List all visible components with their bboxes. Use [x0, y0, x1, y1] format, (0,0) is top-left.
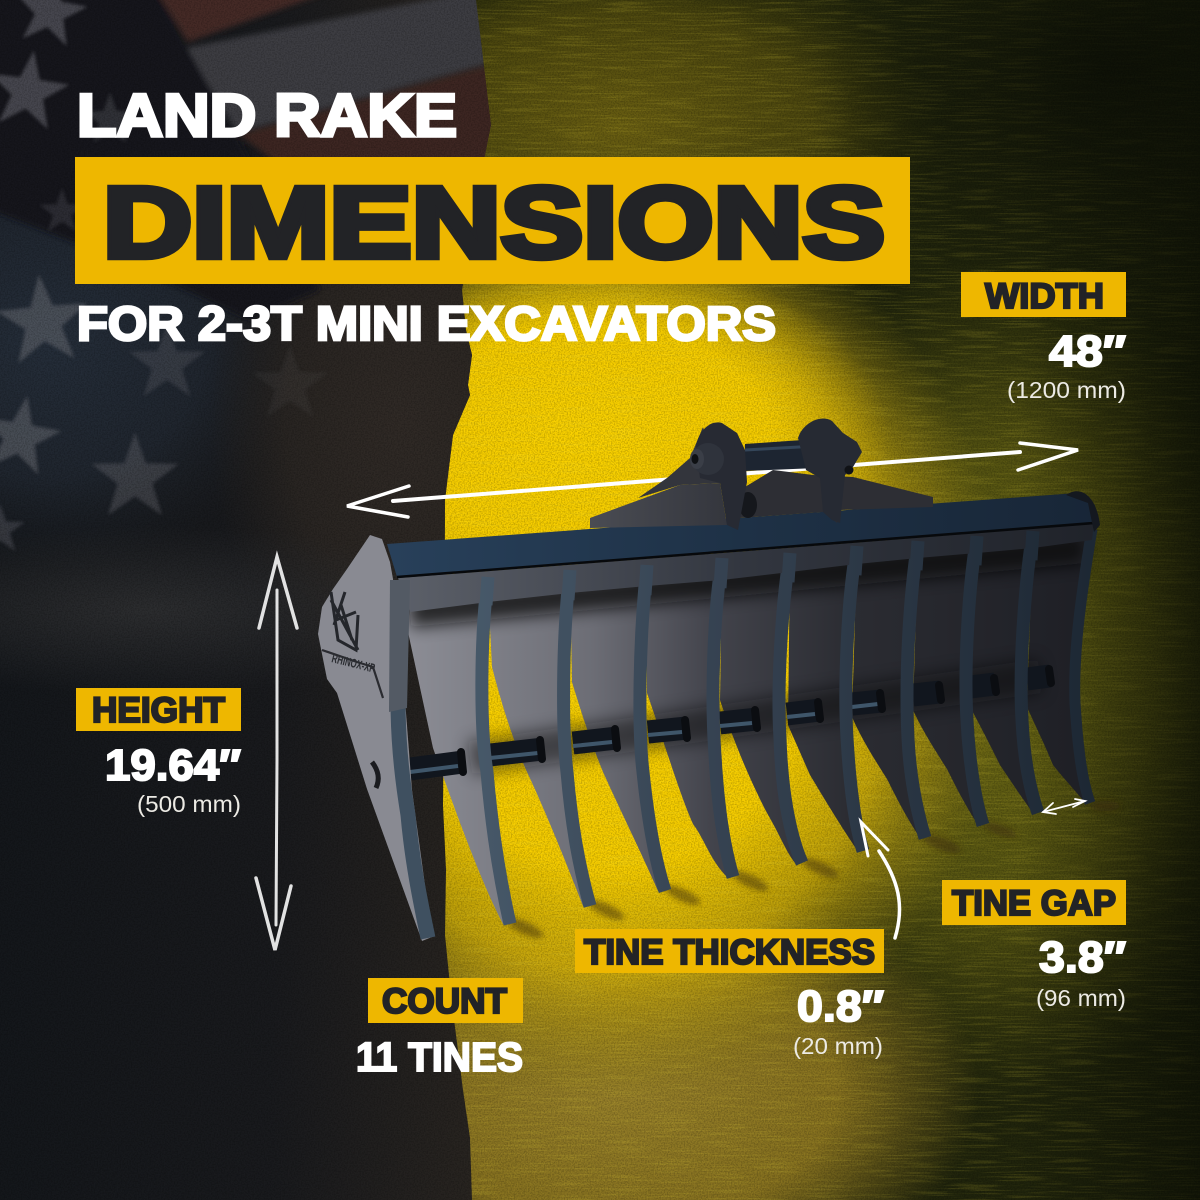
callout: tine gap: TINE GAP [952, 884, 1116, 923]
callout: tine gap: 3.8″ [1039, 933, 1126, 982]
side plate slot [372, 762, 378, 788]
callout: tine gap [942, 880, 1126, 1011]
rib tops [486, 531, 1033, 605]
rhinox-xp logo: RHINOX-XP [330, 651, 376, 676]
tine ground shadows [504, 801, 1120, 942]
beam end cap [1066, 491, 1100, 532]
callout: width [961, 272, 1126, 403]
callout: tine thickness: (20 mm) [793, 1033, 883, 1059]
front left plate [590, 483, 727, 528]
right ear [798, 418, 862, 523]
callout: count: COUNT [382, 982, 507, 1021]
wing behind left plate [638, 427, 720, 498]
title: land rake: LAND RAKE [77, 82, 457, 149]
callout: count [356, 978, 523, 1080]
callout: height: HEIGHT [92, 691, 225, 730]
arrow: tine thickness pointer [861, 822, 900, 938]
arrow: tine gap [1043, 799, 1085, 814]
tine blades [408, 531, 1092, 924]
title banner: dimensions: DIMENSIONS [103, 167, 885, 279]
callout: count: 11 TINES [356, 1034, 523, 1080]
shadow under beam [410, 548, 1085, 612]
cross rod with collars [410, 669, 1051, 772]
subtitle: FOR 2-3T MINI EXCAVATORS [77, 298, 776, 351]
side plate rib [398, 700, 428, 938]
callout: tine thickness: 0.8″ [797, 982, 884, 1031]
tine ribs [482, 529, 1092, 924]
callout: height: (500 mm) [137, 791, 241, 817]
callout: height [76, 688, 241, 817]
strip under beam [398, 524, 1094, 612]
rhinox-xp logo [322, 592, 383, 698]
callout: width: (1200 mm) [1007, 377, 1126, 403]
arrow: height dimension [256, 557, 297, 950]
left ear [696, 422, 747, 530]
main pin [745, 439, 817, 471]
arrow: width dimension [347, 443, 1078, 517]
callout: tine thickness: TINE THICKNESS [584, 933, 875, 972]
lower pin [739, 492, 757, 518]
flag stars [0, 0, 328, 551]
left boss and pin hole [692, 443, 724, 475]
callout: width: WIDTH [985, 277, 1104, 316]
callout: tine thickness [575, 929, 884, 1059]
flag stripes [0, 0, 500, 320]
callout: width: 48″ [1049, 327, 1126, 376]
top beam [387, 493, 1095, 577]
side plate [318, 535, 432, 941]
rake attachment [318, 418, 1120, 942]
callout: tine gap: (96 mm) [1036, 985, 1126, 1011]
title banner: dimensions [75, 157, 910, 284]
callout: height: 19.64″ [105, 741, 241, 790]
rear plate and right ear base [740, 470, 933, 523]
background: dark flag panel [0, 0, 500, 1200]
mount [590, 418, 933, 530]
